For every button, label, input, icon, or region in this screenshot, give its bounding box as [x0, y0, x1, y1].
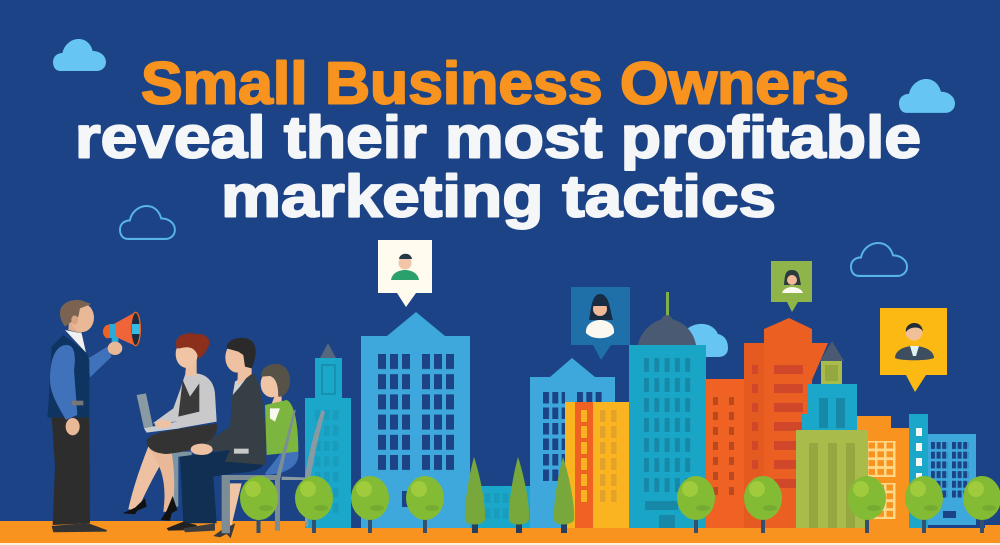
building: teal dome tower [629, 292, 706, 528]
speech bubble: man yellow [880, 308, 947, 392]
person: man in suit [167, 338, 296, 538]
trees: cypress row [465, 457, 574, 533]
building: teal tower left [305, 343, 351, 528]
tree 5 [677, 476, 715, 533]
title line 2: reveal their most profitable [75, 104, 921, 170]
tree 4 [406, 476, 444, 533]
cypress 3 [554, 457, 574, 533]
building: orange right [857, 416, 909, 528]
building: teal thin and blue right [909, 414, 976, 528]
tree 1 [240, 476, 278, 533]
cypress 1 [465, 457, 485, 533]
speech bubble: man green [378, 240, 432, 307]
cloud: behind dome [687, 324, 728, 357]
tree 6 [744, 476, 782, 533]
cloud: outline left [120, 206, 175, 239]
title line 3: marketing tactics [221, 164, 776, 230]
tree 2 [295, 476, 333, 533]
building: blue behind yellow [530, 358, 615, 528]
tree 3 [351, 476, 389, 533]
building: low teal [430, 486, 535, 528]
ground [0, 521, 1000, 545]
person: woman in green [261, 364, 325, 527]
title [75, 50, 921, 230]
speech bubble: woman green [771, 261, 812, 312]
speech bubble: woman blue [571, 287, 630, 360]
tree 8 [905, 476, 943, 533]
trees: round row [240, 476, 1000, 533]
building: yellow and orange [565, 402, 629, 528]
title line 1: Small Business Owners [141, 50, 849, 116]
cypress 2 [509, 457, 529, 533]
cloud: top left [53, 39, 106, 71]
cloud: outline right [851, 243, 907, 276]
person: speaker with megaphone [47, 300, 140, 532]
building: orange tower [706, 318, 828, 528]
person: woman with laptop [123, 333, 217, 521]
building: green with teal top [796, 341, 868, 528]
building: large blue [361, 312, 470, 528]
tree 7 [848, 476, 886, 533]
tree 9 [963, 476, 1000, 533]
cloud: top right [899, 79, 955, 113]
